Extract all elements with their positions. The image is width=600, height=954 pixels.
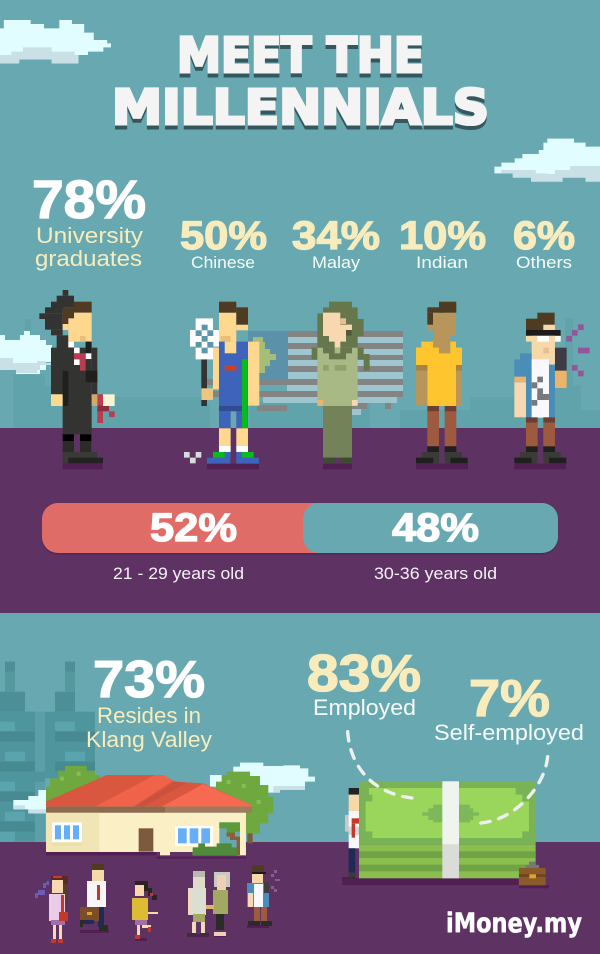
stat: indian — [399, 214, 486, 272]
stat: self-employed: Self-employed — [434, 720, 584, 745]
age split bar — [42, 503, 558, 555]
ground: second panel — [0, 842, 600, 954]
skyline: first scene background — [13, 318, 600, 428]
stat: self-employed — [434, 670, 584, 745]
cloud: top left — [0, 20, 111, 63]
elderly couple — [187, 871, 230, 937]
clouds behind house — [13, 763, 315, 813]
businessman with briefcase — [80, 864, 109, 933]
man behind money — [342, 788, 359, 881]
stat: chinese: Chinese — [191, 253, 255, 272]
age label: 30-36: 30-36 years old — [374, 564, 497, 583]
stat: employed: 83% — [307, 645, 421, 703]
dashed line employed — [348, 732, 420, 799]
hipster figure with phone — [514, 313, 590, 469]
graduate figure — [39, 290, 115, 469]
stat: university graduates: 78% — [32, 170, 146, 230]
woman with music notes — [35, 876, 68, 943]
briefcase — [519, 862, 549, 888]
age split bar: 52% — [150, 506, 237, 550]
stat: employed: Employed — [313, 695, 416, 720]
hipster small — [247, 865, 280, 928]
man in yellow shirt figure — [416, 302, 468, 469]
stat: chinese — [180, 214, 267, 272]
stat: chinese: 50% — [180, 214, 267, 258]
stat: university graduates: University — [36, 223, 143, 248]
stat: klang valley: Klang Valley — [86, 727, 212, 752]
title: MEET THE — [177, 28, 424, 84]
tree left — [46, 766, 107, 807]
people group — [35, 864, 280, 943]
stat: indian: Indian — [416, 253, 468, 272]
cloud: top right — [494, 139, 600, 182]
stat: indian: 10% — [399, 214, 486, 258]
ground: first panel — [0, 428, 600, 613]
malaysian flag — [207, 331, 403, 415]
stat: malay: 34% — [292, 214, 380, 258]
title — [112, 28, 489, 136]
age split bar: 48% — [392, 506, 479, 550]
stat: others: 6% — [513, 214, 575, 258]
stat: klang valley: 73% — [93, 651, 205, 709]
stat: university graduates: graduates — [35, 246, 142, 271]
stat: malay — [292, 214, 380, 272]
stat: university graduates — [32, 170, 146, 271]
stat: klang valley — [86, 651, 212, 752]
dashed line self-employed — [475, 757, 548, 823]
stat: klang valley: Resides in — [97, 703, 201, 728]
stat: malay: Malay — [312, 253, 361, 272]
stat: others: Others — [516, 253, 572, 272]
badminton player figure — [184, 302, 259, 469]
title: MILLENNIALS — [112, 80, 489, 136]
girl running — [132, 881, 158, 941]
money stack — [342, 781, 536, 885]
age label: 21-29: 21 - 29 years old — [113, 564, 244, 583]
house — [46, 775, 252, 859]
stat: self-employed: 7% — [469, 670, 550, 728]
city buildings — [0, 662, 95, 842]
hijab woman figure — [312, 302, 370, 469]
tree right — [216, 772, 273, 843]
cloud: mid left — [0, 331, 52, 374]
